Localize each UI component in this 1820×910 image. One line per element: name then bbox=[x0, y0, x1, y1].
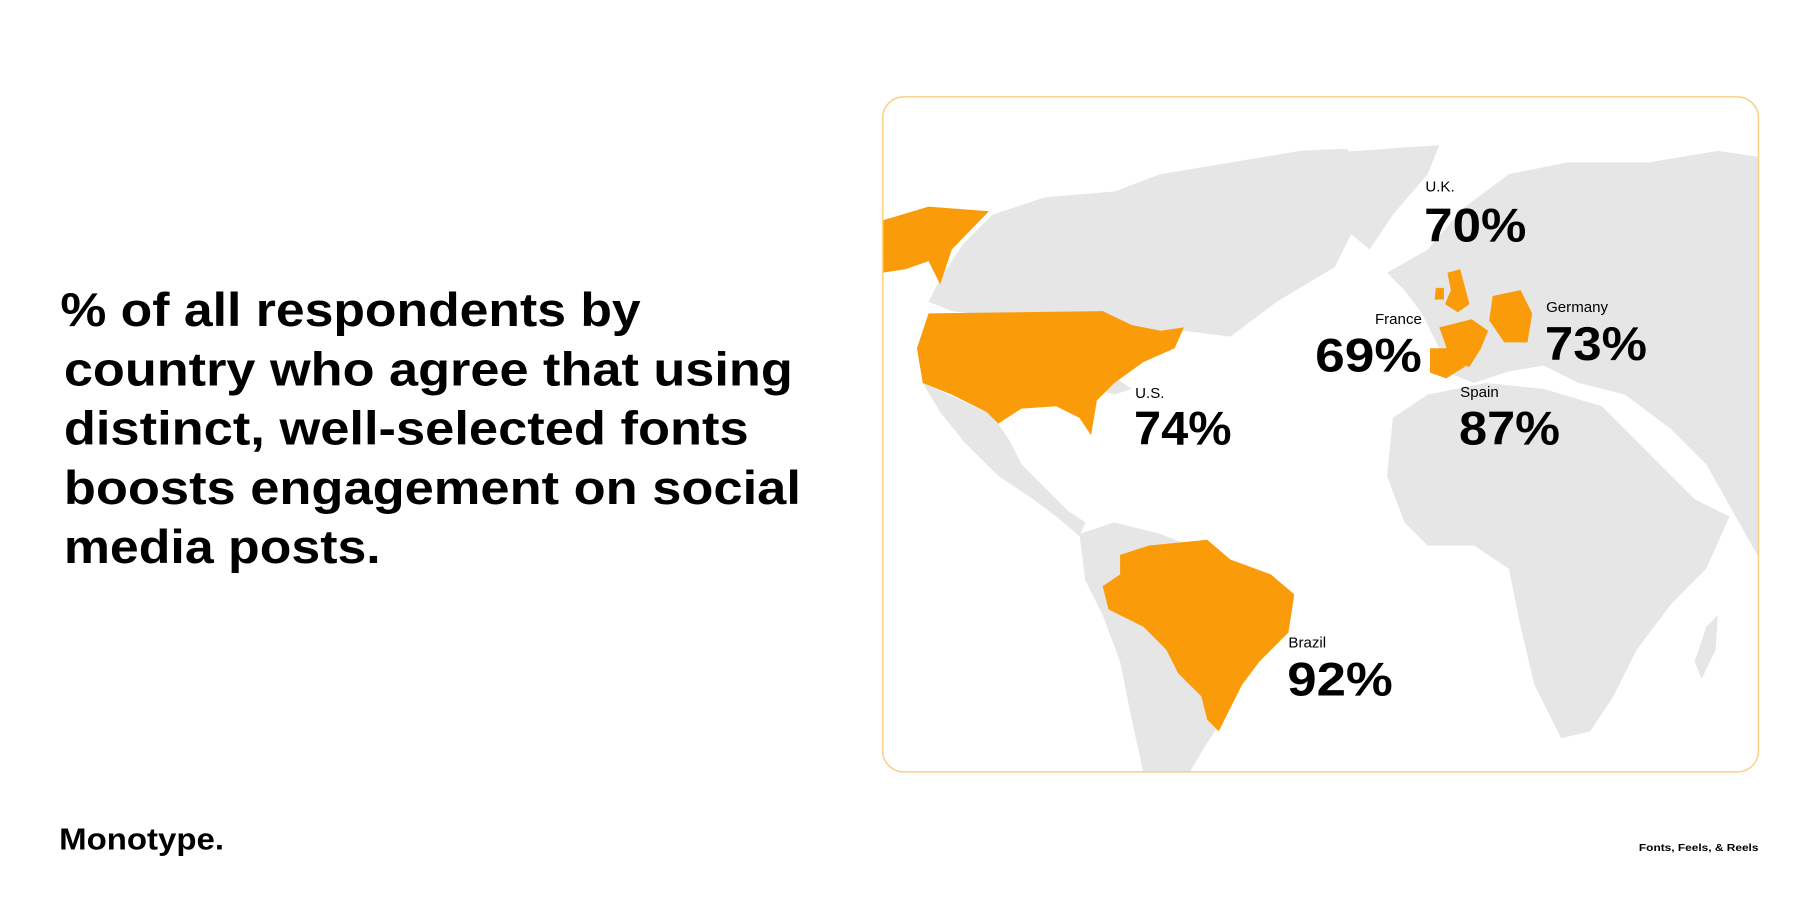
label: U.K.: 70% bbox=[1424, 199, 1526, 252]
logo: Monotype: Monotype. bbox=[59, 824, 224, 857]
label: France: 69% bbox=[1315, 329, 1422, 382]
label: Spain: 87% bbox=[1459, 403, 1560, 456]
title text block: distinct, well-selected fonts bbox=[64, 403, 749, 456]
label: Brazil: 92% bbox=[1287, 653, 1393, 706]
map: highlighted countries bbox=[882, 207, 1532, 731]
label: Brazil: Brazil bbox=[1288, 635, 1326, 652]
label: France bbox=[1315, 311, 1422, 382]
label: Germany bbox=[1545, 299, 1647, 371]
title text block: % of all respondents by bbox=[60, 284, 641, 337]
label: Spain: Spain bbox=[1460, 384, 1499, 401]
map: grey continents bbox=[923, 145, 1758, 772]
label: U.K.: U.K. bbox=[1425, 179, 1455, 196]
label: Germany: 73% bbox=[1545, 318, 1647, 371]
title text block bbox=[60, 284, 801, 574]
panel border bbox=[883, 97, 1758, 772]
title text block: media posts. bbox=[64, 521, 381, 574]
label: U.K. bbox=[1424, 179, 1526, 252]
label: Spain bbox=[1459, 384, 1560, 456]
panel: map bbox=[882, 97, 1758, 772]
footer source: Fonts, Feels, & Reels bbox=[1639, 843, 1759, 854]
label: France: France bbox=[1375, 311, 1422, 328]
title text block: country who agree that using bbox=[64, 343, 793, 396]
label: Brazil bbox=[1287, 635, 1393, 706]
label: U.S.: 74% bbox=[1134, 403, 1232, 456]
label: U.S.: U.S. bbox=[1135, 385, 1165, 402]
title text block: boosts engagement on social bbox=[64, 462, 801, 515]
label: Germany: Germany bbox=[1546, 299, 1609, 316]
